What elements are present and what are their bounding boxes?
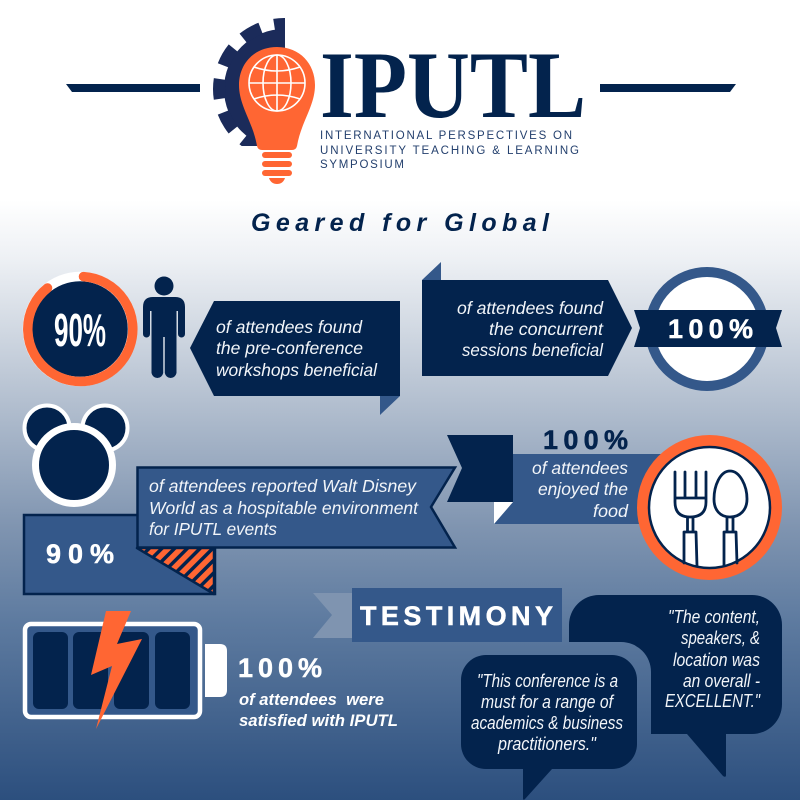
stat box: 90% hospitable environment: 90% [46, 539, 114, 569]
icon: gear [213, 18, 285, 146]
icon: light bulb [239, 47, 315, 150]
icon: mouse ears [24, 406, 128, 504]
badge: 100% concurrent sessions: 100% [668, 314, 753, 344]
ribbon: food: 100% [543, 425, 628, 455]
callout: pre-conference workshops [190, 301, 400, 415]
speech bubble: right testimonial [569, 595, 782, 777]
logo subtitle: SYMPOSIUM [320, 159, 404, 171]
logo: gear and light bulb with globe [213, 18, 315, 184]
speech bubble: right testimonial: EXCELLENT." [665, 690, 761, 711]
badge: 100% concurrent sessions [634, 272, 782, 386]
hatched fold [137, 548, 214, 594]
heading: Geared for Global: Geared for Global [251, 209, 550, 237]
banner: Testimony: TESTIMONY [360, 601, 553, 631]
ribbon: Walt Disney World: of attendees reported Walt Disney [149, 476, 417, 496]
ribbon: food: of attendees [532, 458, 628, 478]
ribbon: Walt Disney World: for IPUTL events [149, 519, 277, 539]
icon: fork [675, 472, 706, 566]
icon: person [143, 276, 185, 378]
speech bubble: right testimonial: speakers, & [681, 627, 760, 648]
stat text: satisfied with IPUTL: 100% [238, 653, 322, 683]
callout: concurrent sessions: sessions beneficial [462, 340, 604, 360]
stat ring: 90% [28, 276, 133, 382]
header rule: right [600, 84, 736, 92]
ribbon: food: enjoyed the [538, 479, 628, 499]
callout: pre-conference workshops: of attendees found [216, 317, 363, 337]
ribbon: Walt Disney World [138, 468, 455, 548]
header rule: left [66, 84, 200, 92]
stat text: satisfied with IPUTL [238, 653, 398, 730]
ribbon: Walt Disney World: World as a hospitable environment [149, 498, 419, 518]
icon: fork and spoon badge [637, 435, 782, 580]
callout: concurrent sessions: the concurrent [489, 319, 604, 339]
speech bubble: left testimonial: practitioners." [497, 733, 597, 754]
speech bubble: left testimonial: "This conference is a [477, 670, 618, 691]
speech bubble: left testimonial: must for a range of [481, 691, 615, 712]
callout: concurrent sessions: of attendees found [457, 298, 604, 318]
icon: bulb base [262, 152, 292, 184]
logo subtitle: UNIVERSITY TEACHING & LEARNING [320, 145, 579, 157]
logo wordmark: IPUTL [320, 32, 586, 138]
banner: Testimony [313, 588, 562, 642]
stat ring: 90%: 90% [54, 304, 106, 356]
icon: battery [25, 611, 227, 729]
icon: globe [249, 55, 305, 111]
callout: concurrent sessions [422, 262, 632, 376]
stat box: 90% hospitable environment [24, 515, 215, 594]
speech bubble: right testimonial: "The content, [668, 606, 760, 627]
ribbon: food: food [593, 501, 629, 521]
callout: pre-conference workshops: the pre-conference [216, 338, 363, 358]
speech bubble: left testimonial [461, 655, 637, 800]
logo subtitle [320, 130, 579, 171]
speech bubble: right testimonial: location was [673, 649, 760, 670]
stat text: satisfied with IPUTL: satisfied with IPUTL [239, 711, 398, 730]
speech bubble: left testimonial: academics & business [471, 712, 623, 733]
callout: pre-conference workshops: workshops beneficial [216, 360, 378, 380]
stat text: satisfied with IPUTL: of attendees were [239, 690, 384, 709]
logo subtitle: INTERNATIONAL PERSPECTIVES ON [320, 130, 572, 142]
speech bubble: right testimonial: an overall - [683, 670, 760, 691]
icon: spoon [714, 471, 747, 565]
ribbon: food [447, 425, 662, 524]
